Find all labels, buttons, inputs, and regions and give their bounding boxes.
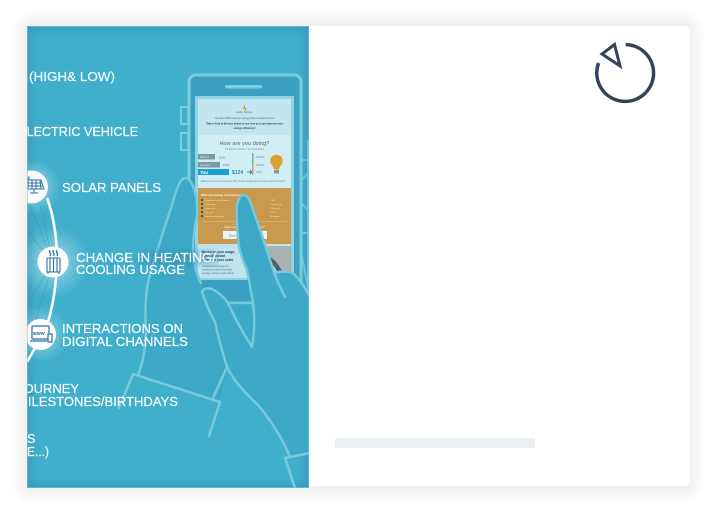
phone screen: email report: Home size [205,208,216,210]
phone screen: email report: Unknown [270,216,280,218]
hand fill [188,180,309,452]
phone screen: email report: 90210 [270,212,277,214]
panel edge [28,26,308,488]
phone screen: email report: $155 [223,163,230,167]
phone screen: email report: You spent $39 more on energy than average homes. [214,116,275,120]
milestone: digital channels: DIGITAL CHANNELS [62,335,188,349]
hand outline [119,178,310,488]
phone screen: email report: could cut your costs [202,258,233,262]
phone screen: email report: this thermostat [202,254,226,258]
phone screen: email report: Efficient [200,155,209,159]
milestone: solar panels [15,170,161,204]
phone screen: email report: $124 [232,170,243,176]
phone screen: email report: Home type [205,203,216,206]
hand lattice behind phone [302,140,309,292]
text: high low: (HIGH& LOW) [29,70,115,84]
phone screen: email report: 1,671 [270,200,276,202]
phone screen: email report: 25 March 2019 to 23 April 2019 [225,147,264,151]
phone screen: email report: Average [200,163,210,167]
phone screen: email report: Home heating type [205,215,224,218]
icon: solar panel [26,176,44,193]
phone screen: email report: installing a smart thermostat. [202,268,233,272]
phone screen: email report: $145 [219,156,226,160]
phone screen: email report: Number of similar homes [205,199,230,202]
placeholder text bar [335,438,535,448]
milestone glow [27,162,86,360]
lightbulb icon [270,155,283,174]
text: cropped item: E...) [27,445,49,459]
thumb [138,178,201,375]
text: cropped item [27,432,49,459]
milestone: heating and cooling: COOLING USAGE [76,263,185,277]
icon: devices [30,326,52,342]
phone screen: email report: energy efficiency! [233,126,256,130]
icon: pie chart [595,42,656,104]
phone screen: email report [195,96,294,280]
phone screen: email report: Efficient homes use less than 20% of the energy that you have used this month. [201,180,286,183]
panel: teal illustration [27,26,309,488]
hand lines [119,178,310,488]
milestone: heating and cooling: CHANGE IN HEATING/ [76,251,217,265]
milestone: digital channels: INTERACTIONS ON [62,322,183,336]
panel background [27,26,309,488]
phone screen: email report: Explore [229,234,239,238]
phone screen: email report: Average savings could add up [202,272,235,275]
text: cropped item: S [27,432,35,446]
phone screen: email report: Take a look at the tips below to see how you can improve your [206,122,283,126]
milestone: solar panels: SOLAR PANELS [62,181,161,195]
wrist cuff [119,367,227,436]
panel vignette [24,23,312,491]
phone screen: email report: Who am I being compared to? [201,193,244,197]
phone screen: email report: You [200,170,208,175]
text: journey milestones [27,384,178,406]
milestone rays [28,205,50,320]
milestone: digital channels: www [32,331,45,337]
text shadow behind heading [140,251,216,265]
phone screen: email report: GOOD [256,163,264,167]
phone screen: email report: YOU [256,170,262,174]
phone screen: email report: GREAT [256,155,265,159]
pointing finger [228,195,285,347]
milestone: heating and cooling [38,246,217,278]
phone screen: email report: Based on your usage, [202,250,235,254]
phone screen: email report: Single family [270,204,283,206]
phone screen: email report: 1,400 sq ft [270,207,281,210]
icon: radiator [47,250,60,274]
phone screen: email report: Consider purchasing and [202,265,229,268]
phone body [181,75,301,303]
phone screen: email report: Hello, Johnny, [236,110,253,114]
milestone: digital channels [25,319,188,350]
milestone connector [27,198,57,362]
phone screen: email report: How are you doing? [220,141,269,147]
phone screen: email report: Zip code [205,212,214,214]
phone screen: email report: Want a free home energy assessment? [224,226,265,229]
